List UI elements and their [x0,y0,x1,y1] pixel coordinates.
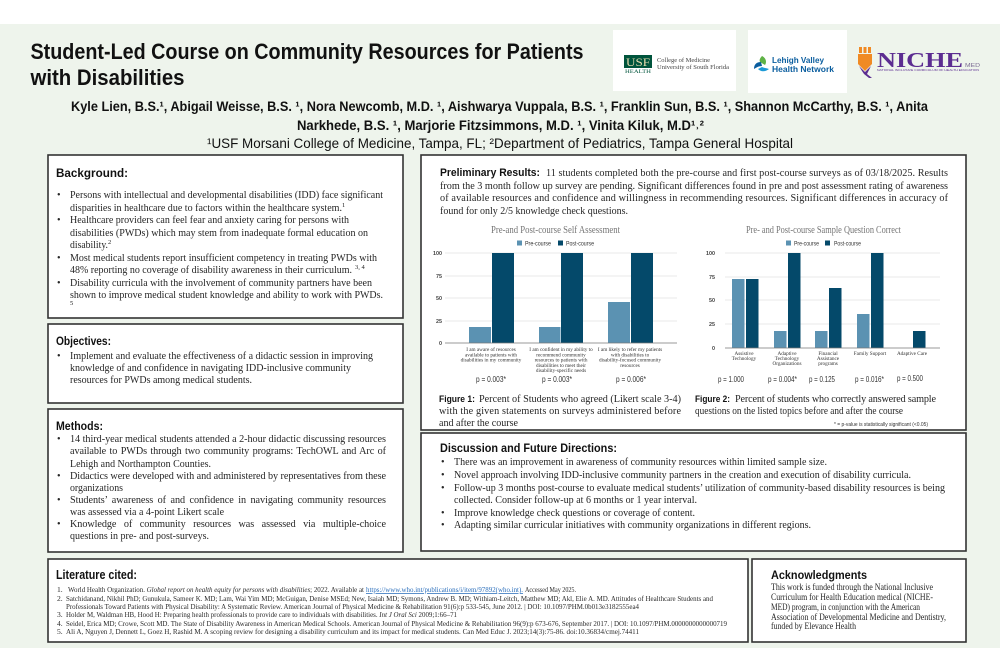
bar chart: self assessment: 25 [436,319,442,325]
p-values: p = 0.004* [768,375,797,384]
reference list [57,585,727,636]
bullet list: background: • [57,215,61,226]
logo: USF Health: College of Medicine [657,57,710,64]
p-values [718,374,923,384]
category labels: disabilities in my community [461,358,522,364]
bar chart: self assessment: 100 [433,251,442,257]
bullet list: background: • [57,253,61,264]
logo: USF Health: HEALTH [625,70,652,75]
bullet list: background: 5 [70,300,73,307]
bullet list: discussion: There was an improvement in awareness of community resources within limited sample size. [454,457,827,468]
reference list: 4. [57,619,63,628]
reference list: Holder M, Waldman HB, Hood H: Preparing health professionals to provide care to individuals with disabilities. Int J Oral Sci 2009;1:66–71 [66,610,457,619]
logo: NICHE-MED: NICHE [877,48,963,72]
bar chart: self assessment: 0 [439,341,442,347]
legend: Post-course [566,242,595,248]
bullet list: methods: • [57,471,61,482]
bullet list: background: disability. [70,240,108,251]
p-values: p = 0.500 [897,374,923,383]
figure 1 caption: and after the course [439,418,518,429]
bar chart: sample question correct: 75 [709,275,715,281]
heading: methods: Methods: [56,421,103,433]
bar chart: sample question correct: 50 [709,298,715,304]
bullet list: background: Persons with intellectual and developmental disabilities (IDD) face significant [70,190,383,201]
category labels: Financial [818,351,838,357]
figure 2 caption: questions on the listed topics before and after the course [695,406,903,417]
category labels: I am confident in my ability to [529,346,593,353]
category labels [461,346,662,374]
legend [786,240,862,248]
bullet list: discussion: • [441,470,445,481]
bullet list: methods: Didactics were developed with and administered by representatives from these [70,471,386,482]
results summary text: 11 students completed both the pre-course and first post-course surveys as of 03/18/2025. Results [546,168,948,179]
heading: acknowledgments: Acknowledgments [771,570,867,582]
p-values: p = 0.016* [855,375,884,384]
reference list: 2. [57,594,63,603]
bullet list: background: Most medical students report insufficient competency in treating PWDs with [70,253,377,264]
bullet list: discussion: Novel approach involving IDD-inclusive community partners in the creation and execution of disability curricula. [454,470,911,481]
legend: Pre-course [794,242,820,248]
chart title: Pre- and Post-course Sample Question Correct [746,225,901,236]
panel: literature cited [48,559,748,642]
bar chart: sample question correct: 25 [709,322,715,328]
bullet list: background: 1 [342,202,345,209]
bar chart: self assessment [433,225,677,384]
reference list: World Health Organization. Global report on health equity for persons with disabilities; 2022. Available at [68,585,365,594]
logo: NICHE-MED: NATIONAL INCLUSIVE CURRICULUM OF HEALTH EDUCATION [877,68,979,72]
bullet list: discussion: • [441,483,445,494]
authors [71,98,928,133]
bullet list: background: disabilities (PWDs) which may stem from inadequate formal education on [70,228,368,239]
logo: NICHE-MED [858,47,981,78]
bullet list: background: 3, 4 [355,264,366,271]
category labels: I am likely to refer my patients [598,346,662,353]
bullet list: methods: organizations [70,483,123,494]
bullet list: methods [57,434,387,542]
acknowledgment text: funded by Elevance Health [771,621,856,631]
panel: methods [48,409,403,552]
p-values: p = 0.003* [542,375,572,384]
figure 1 caption [439,394,681,429]
category labels: programs [818,361,838,367]
legend [517,240,595,248]
bar chart: sample question correct [706,225,940,384]
acknowledgment text: Association of Developmental Medicine and Dentistry, [771,612,946,622]
logo: Lehigh Valley Health Network: Lehigh Valley [772,55,824,65]
bullet list: background: 2 [108,239,111,246]
category labels: resources [620,363,640,369]
logo: USF Health: University of South Florida [657,64,729,71]
panel: objectives [48,324,403,403]
heading: discussion: Discussion and Future Directions: [440,441,617,455]
bullet list: discussion: • [441,520,445,531]
category labels: disability-specific needs [536,367,586,374]
bar chart: self assessment: 50 [436,296,442,302]
bullet list: methods: Students’ awareness of and confidence in navigating community resources [70,495,386,506]
bullet list: background: shown to improve medical student knowledge and ability to work with PWDs. [70,290,383,301]
panel: discussion and future directions [421,433,966,551]
category labels: Technology [775,356,800,362]
category labels: disability-focused community [599,357,661,364]
figure 2 caption: Figure 2: [695,394,730,405]
figure 2 caption [695,394,936,417]
bullet list: background: disparities in healthcare due to factors within the healthcare system. [70,203,342,214]
reference list: 3. [57,610,63,619]
bullet list: methods: • [57,495,61,506]
authors: Kyle Lien, B.S.¹, Abigail Weisse, B.S. ¹, Nora Newcomb, M.D. ¹, Aishwarya Vuppala, B.S. ¹, Franklin Sun, B.S. ¹, Shannon McCarthy, B.S. ¹, Anita [71,98,928,114]
title: Student-Led Course on Community Resources for Patients [30,39,584,64]
bullet list: methods: Lehigh and Northampton Counties. [70,459,211,470]
category labels [732,351,928,367]
bar chart: self assessment: 75 [436,274,442,280]
bullet list: discussion: • [441,457,445,468]
bullet list: methods: • [57,434,61,445]
bullet list: discussion: Improve knowledge check questions or coverage of content. [454,508,695,519]
results summary text: found for only 2/5 knowledge check questions. [440,206,628,217]
reference list: Accessed May 2025. [525,585,576,594]
p-values [476,375,646,384]
reference list: Satchidanand, Nikhil PhD; Gunukula, Sameer K. MD; Lam, Wai Yim MD; McGuigan, Denise MSEd; New, Isaiah MD; Symons, Andrew B. MD; Withiam-Leitch, Matthew MD; Akl, Elie A. MD. Attitudes of Healthcare Students and [66,594,713,603]
heading: preliminary results: Preliminary Results: [440,167,540,179]
category labels: Assistance [817,356,840,362]
bullet list: background: Disability curricula with the involvement of community partners have been [70,278,372,289]
bullet list: background: Healthcare providers can feel fear and anxiety caring for persons with [70,215,349,226]
bullet list: discussion: Adapting similar curricular initiatives with community organizations in different regions. [454,520,811,531]
heading: literature cited: Literature cited: [56,568,137,582]
figure 2 caption: Percent of students who correctly answered sample [735,394,936,405]
p-values: p = 0.003* [476,375,506,384]
bullet list: methods: available to PWDs through two community programs: TechOWL and Arc of [70,446,387,457]
figure 1 caption: Figure 1: [439,394,475,405]
bullet list: methods: Knowledge of community resources was assessed via multiple-choice [70,519,386,530]
p-values: p = 0.125 [809,375,835,384]
bullet list: methods: was assessed via a 4-point Likert scale [70,507,224,518]
chart title: Pre-and Post-course Self Assessment [491,225,620,236]
category labels: recommend community [536,352,586,358]
logo: NICHE-MED: MED [965,63,981,69]
figure 1 caption: with the given statements on surveys administered before [439,406,681,417]
legend: Pre-course [525,242,552,248]
bullet list: background: • [57,278,61,289]
bullet list: discussion: • [441,508,445,519]
category labels: Adaptive Care [897,351,928,357]
legend: Post-course [834,242,862,248]
acknowledgment text: Curriculum for Health Education medical (NICHE- [771,592,933,602]
heading: background: Background: [56,166,128,180]
results summary text [440,168,949,217]
panel: background [48,155,403,318]
bullet list: methods: • [57,519,61,530]
category labels: available to patients with [465,352,517,358]
bullet list: background: 48% reporting no coverage of disability awareness in their curriculum. [70,265,352,276]
acknowledgment text: This work is funded through the National Inclusive [771,582,933,592]
reference list: Seidel, Erica MD; Crowe, Scott MD. The State of Disability Awareness in American Medical Schools. American Journal of Physical Medicine & Rehabilitation 96(9):p 673-676, September 2017. | DOI: 10.1097/PHM.0000000000000719 [66,619,727,628]
p-values: p = 0.006* [616,375,646,384]
bullet list: methods: questions in pre- and post-surveys. [70,531,209,542]
bullet list: objectives [57,351,373,386]
heading: objectives: Objectives: [56,336,111,348]
logo: USF Health: USF [626,55,650,69]
bullet list: methods: 14 third-year medical students attended a 2-hour didactic discussing resources [70,434,386,445]
bullet list: objectives: resources for PWDs among medical students. [70,375,252,386]
figure 1 caption: Percent of Students who agreed (Likert scale 3-4) [479,394,681,405]
bar chart: sample question correct: 100 [706,251,715,257]
category labels: Technology [732,356,757,362]
reference list: 1. [57,585,63,594]
bullet list: objectives: Implement and evaluate the effectiveness of a didactic session in improving [70,351,373,362]
panel: acknowledgments [752,559,966,642]
category labels: with disabilities to [611,352,650,358]
bullet list: discussion: Follow-up 3 months post-course to evaluate medical students’ utilization of community-based disability resources is being [454,483,945,494]
p-values: p = 1.000 [718,375,744,384]
authors: Narkhede, B.S. ¹, Marjorie Fitzsimmons, M.D. ¹, Vinita Kiluk, M.D¹˒² [297,117,704,133]
category labels: Assistive [734,351,754,357]
category labels: Adaptive [777,351,797,357]
bullet list: objectives: knowledge of and confidence in navigating IDD-inclusive community [70,363,352,374]
logo: Lehigh Valley Health Network: Health Network [772,64,834,74]
category labels: Family Support [854,351,887,357]
acknowledgment text [771,582,946,631]
footnote: significance: * = p-value is statistically significant (<0.05) [834,422,928,428]
category labels: Organizations [772,361,802,367]
title [30,39,583,90]
category labels: resources to patients with [535,358,588,364]
results summary text: from the 3 month follow up survey are pending. Significant differences found in pre and post assessment rating of awareness [440,181,948,192]
results summary text: of available resources and confidence and willingness in recommending resources. Significant differences in accuracy of [440,193,949,204]
logo: Lehigh Valley Health Network [748,30,847,93]
logo: USF Health [613,30,736,91]
category labels: disabilities to meet their [536,363,586,369]
title: with Disabilities [30,65,184,90]
reference list: Ali A, Nguyen J, Dennett L, Goez H, Rashid M. A scoping review for designing a disability curriculum and its impact for medical students. Can Med Educ J. 2023;14(3):75-86. doi:10.36834/cmej.74411 [66,627,639,636]
acknowledgment text: MED) program, in conjunction with the American [771,602,920,612]
category labels: I am aware of resources [466,346,516,353]
bullet list: background: • [57,190,61,201]
bar chart: sample question correct: 0 [712,346,715,352]
reference list: 5. [57,627,63,636]
affiliations: ¹USF Morsani College of Medicine, Tampa, FL; ²Department of Pediatrics, Tampa General Hospital [207,135,793,151]
bullet list: discussion: collected. Consider follow-up at 6 months or 1 year interval. [454,495,697,506]
reference list: Professionals Toward Patients with Physical Disability: A Systematic Review. American Journal of Physical Medicine & Rehabilitation 91(6):p 533-545, June 2012. | DOI: 10.1097/PHM.0b013e3182555ea4 [66,602,639,611]
bullet list: objectives: • [57,351,61,362]
bullet list: background [57,190,383,307]
reference list: https://www.who.int/publications/i/item/97892(who.int). [366,585,523,594]
panel: preliminary results [421,155,966,430]
bullet list: discussion [441,457,945,531]
